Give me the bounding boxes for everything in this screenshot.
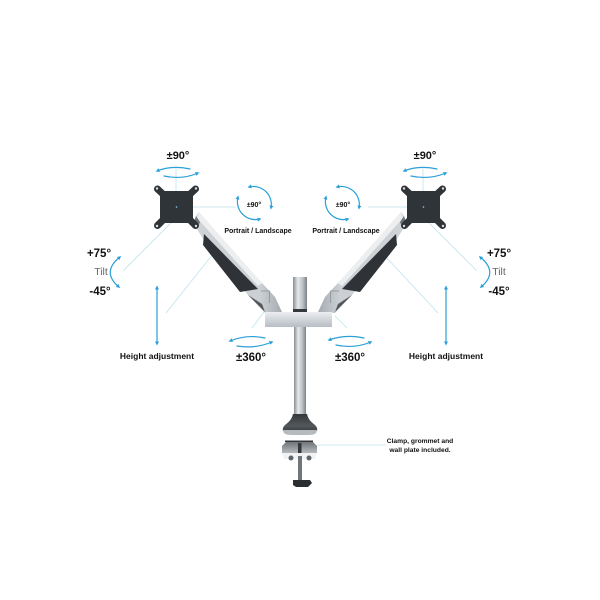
label: left 360: ±360° <box>236 352 266 364</box>
label: left tilt name: Tilt <box>94 266 108 278</box>
label: right swivel: ±90° <box>414 150 436 162</box>
left height arrow <box>156 287 158 344</box>
desk base <box>283 414 317 435</box>
left 360 arrows <box>230 337 272 347</box>
right arm <box>318 212 406 313</box>
label: right tilt name: Tilt <box>492 266 506 278</box>
central pole <box>293 277 307 416</box>
right 360 arrows <box>329 336 371 346</box>
right leader lines <box>335 168 477 328</box>
right swivel arrows ±90 <box>404 167 446 177</box>
right tilt arrow <box>480 257 490 287</box>
left tilt arrow <box>110 257 120 287</box>
desk clamp <box>282 440 317 487</box>
label: left height adjustment: Height adjustment <box>120 351 194 361</box>
label: right tilt down: -45° <box>488 286 510 298</box>
left leader lines <box>123 168 264 328</box>
label: left tilt down: -45° <box>89 286 111 298</box>
label: left swivel: ±90° <box>167 150 189 162</box>
left swivel arrows ±90 <box>157 167 198 177</box>
right rotation arrows <box>325 186 359 220</box>
right VESA plate <box>403 187 444 227</box>
label: right portrait landscape: Portrait / Landscape <box>312 228 380 235</box>
label: left tilt up: +75° <box>87 248 111 260</box>
label: left rotation: ±90° <box>247 201 261 209</box>
left rotation arrows <box>237 186 271 220</box>
label: right height adjustment: Height adjustment <box>409 351 483 361</box>
callout: clamp note: Clamp, grommet and <box>387 438 453 445</box>
left arm <box>194 212 282 313</box>
right height arrow <box>445 287 447 344</box>
label: right tilt up: +75° <box>487 248 511 260</box>
label: right 360: ±360° <box>335 352 365 364</box>
label: right rotation: ±90° <box>336 201 350 209</box>
crossbar <box>265 312 332 327</box>
label: left portrait landscape: Portrait / Landscape <box>224 228 292 235</box>
left VESA plate <box>156 187 197 227</box>
clamp leader line <box>317 444 386 446</box>
callout: clamp note: wall plate included. <box>388 447 451 454</box>
